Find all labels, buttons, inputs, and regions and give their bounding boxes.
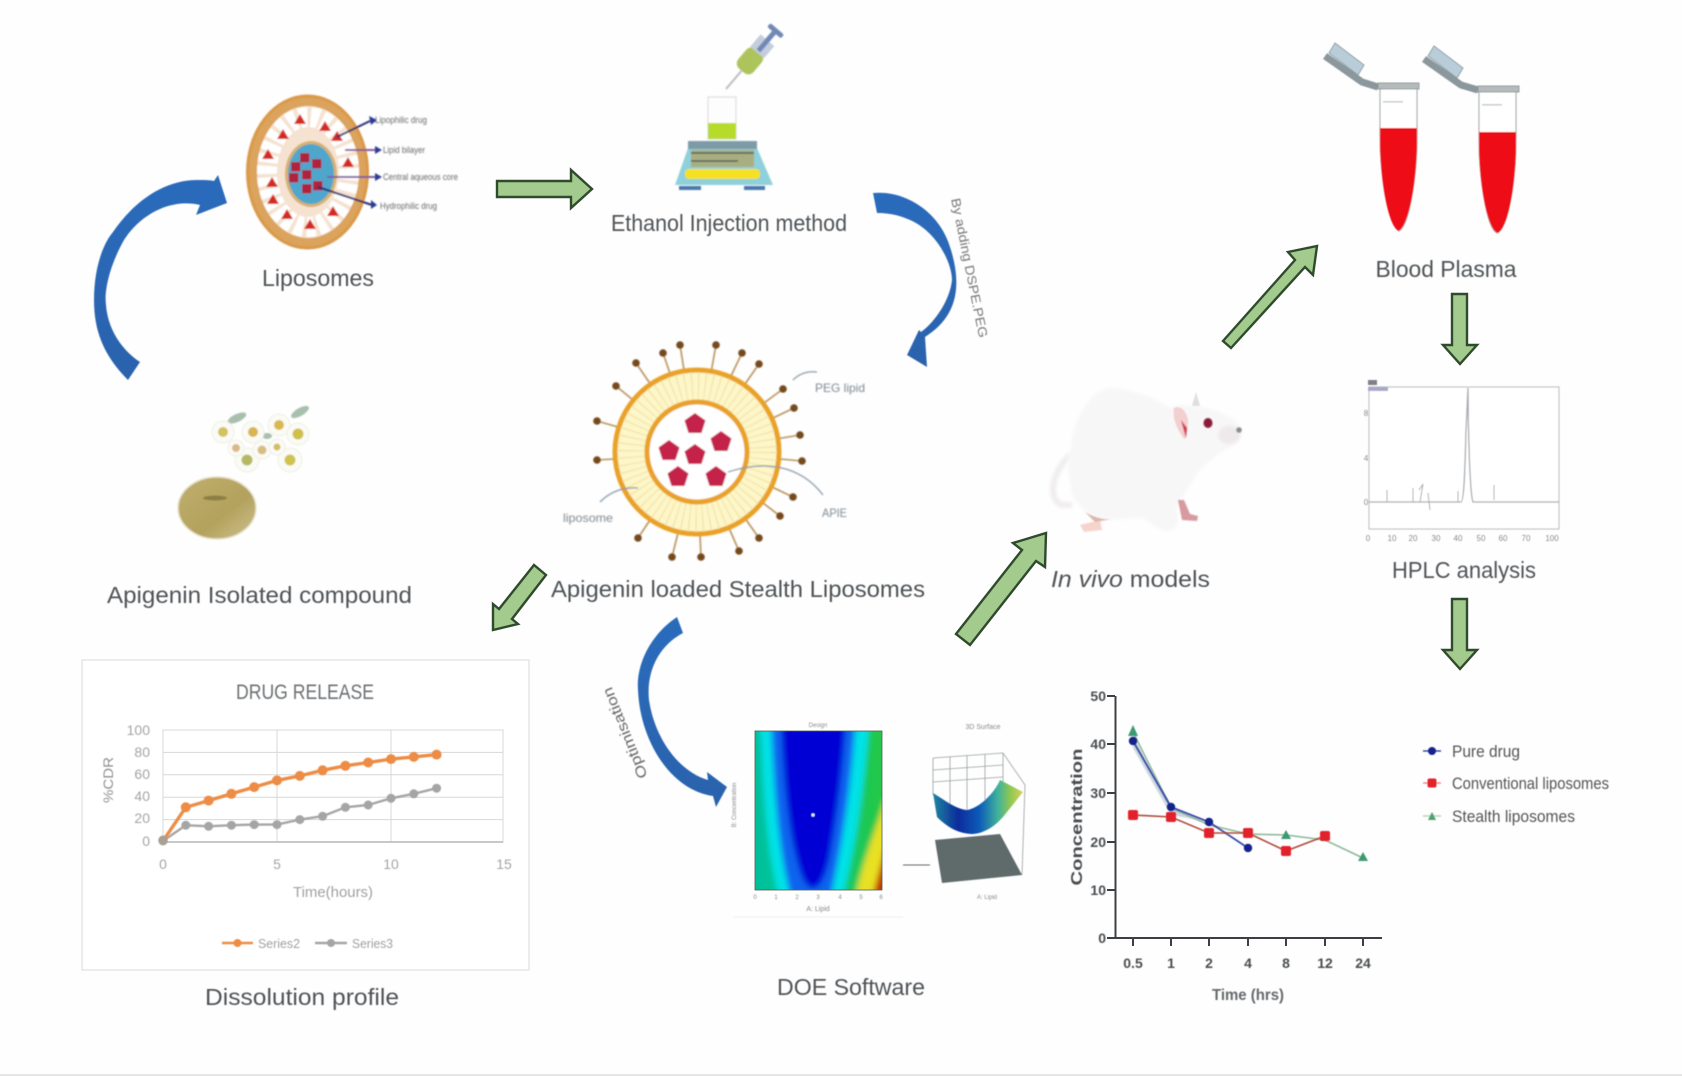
axis tick labels — [127, 722, 512, 872]
HPLC axis labels — [1364, 409, 1559, 543]
HPLC axis labels: 30 — [1432, 534, 1441, 543]
chart: HPLC chromatogram — [1364, 380, 1559, 543]
beaker — [708, 97, 736, 139]
axis tick labels: 20 — [134, 810, 150, 826]
series: stealth liposomes — [1128, 725, 1368, 861]
surface labels — [965, 724, 1001, 901]
chart title: DRUG RELEASE — [236, 681, 374, 704]
tick labels: 0 — [1098, 930, 1106, 946]
contour axis labels: 3 — [816, 895, 820, 901]
eye — [1204, 418, 1212, 428]
contour axis labels: 2 — [795, 895, 799, 901]
icon: stealth liposome — [563, 341, 865, 561]
PEG heads — [593, 341, 806, 561]
axis tick labels: 0 — [159, 856, 167, 872]
contour axis labels: 1 — [774, 895, 778, 901]
leader lines — [600, 372, 823, 502]
ears — [1174, 392, 1200, 439]
tube 1 body — [1380, 88, 1417, 231]
green arrow: to in vivo models — [956, 533, 1046, 645]
liposome labels — [375, 115, 458, 211]
response surface — [933, 780, 1023, 834]
chart: DOE 3D surface — [903, 724, 1025, 901]
body — [1068, 388, 1242, 531]
label: Liposomes: Liposomes — [262, 265, 374, 291]
aqueous core — [288, 144, 334, 204]
line shading — [1133, 735, 1209, 822]
tick labels: 50 — [1090, 688, 1106, 704]
chart: concentration vs time: Time (hrs) — [1212, 987, 1284, 1004]
callout arrows — [318, 121, 378, 205]
chart legend — [1423, 742, 1609, 826]
chart legend: Series2 — [258, 936, 300, 951]
green arrow: to concentration chart — [1443, 599, 1477, 669]
grid — [163, 730, 503, 842]
outer lipid shell — [248, 96, 368, 248]
bilayer ring — [615, 370, 779, 534]
liposome labels: Lipid bilayer — [383, 145, 425, 155]
chart legend: Stealth liposomes — [1452, 807, 1575, 826]
tail — [1053, 455, 1072, 505]
curved arrow: optimisation — [638, 617, 727, 807]
tick labels: 12 — [1317, 955, 1333, 971]
green arrow: to HPLC — [1443, 294, 1477, 364]
contour axis labels: A: Lipid — [806, 906, 830, 913]
tick labels: 24 — [1355, 955, 1371, 971]
tube 1 blood — [1380, 128, 1417, 231]
HPLC axis labels: 60 — [1499, 534, 1508, 543]
muzzle — [1218, 426, 1240, 444]
green arrow: liposomes to ethanol injection — [497, 170, 592, 208]
series 2 — [158, 750, 442, 844]
tube 2 cap — [1428, 46, 1463, 78]
HPLC axis labels: 8 — [1364, 409, 1369, 418]
chart: concentration vs time — [1069, 688, 1609, 1004]
axis titles: %CDR — [100, 757, 116, 803]
stealth liposome labels: liposome — [563, 511, 613, 525]
label: Apigenin loaded Stealth Liposomes: Apigenin loaded Stealth Liposomes — [551, 576, 925, 602]
tick labels: 8 — [1282, 955, 1290, 971]
tube 1 cap — [1329, 43, 1364, 75]
label: Apigenin Isolated compound: Apigenin Isolated compound — [107, 582, 412, 608]
liposome labels: Central aqueous core — [383, 172, 458, 182]
tick labels: 40 — [1090, 736, 1106, 752]
axis titles: Concentration — [1069, 748, 1086, 886]
hind leg shadow — [1085, 512, 1112, 522]
axis tick labels: 10 — [383, 856, 399, 872]
icon: rat — [1053, 388, 1242, 532]
lipid bilayer — [257, 106, 359, 238]
HPLC axis labels: 40 — [1454, 534, 1463, 543]
axes — [1107, 696, 1382, 946]
green arrow: to dissolution profile — [493, 565, 546, 630]
front foot — [1178, 500, 1198, 521]
HPLC axis labels: 20 — [1409, 534, 1418, 543]
surface labels: A: Lipid — [977, 895, 997, 901]
label: Ethanol Injection method: Ethanol Injection method — [611, 210, 847, 236]
balance — [675, 148, 773, 185]
drug pentagons — [658, 413, 732, 486]
tube 2 blood — [1479, 132, 1516, 233]
chart frame — [82, 660, 529, 970]
tick labels: 20 — [1090, 834, 1106, 850]
axis tick labels: 40 — [134, 788, 150, 804]
icon: syringe, beaker and balance — [675, 22, 785, 190]
contour axis labels: Design — [809, 723, 827, 729]
chart legend: Conventional liposomes — [1452, 774, 1609, 793]
design point — [811, 813, 815, 817]
syringe — [718, 22, 785, 95]
PEG chains — [597, 345, 802, 557]
liposome labels: Lipophilic drug — [375, 115, 427, 125]
axis tick labels: 15 — [496, 856, 512, 872]
contour axis labels: 6 — [879, 895, 883, 901]
powder — [178, 477, 256, 539]
series 3 — [158, 784, 441, 845]
HPLC axis labels: 4 — [1364, 454, 1369, 463]
chamomile flowers — [212, 414, 309, 472]
green arrow: to blood plasma — [1223, 246, 1317, 348]
tick labels: 10 — [1090, 882, 1106, 898]
contour axis labels — [732, 723, 883, 913]
label: Dissolution profile: Dissolution profile — [205, 984, 399, 1010]
tick labels: 2 — [1205, 955, 1213, 971]
liposome labels: Hydrophilic drug — [380, 201, 437, 211]
axis tick labels: 0 — [142, 833, 150, 849]
surface grid box — [933, 753, 1025, 875]
chart legend: Pure drug — [1452, 742, 1520, 761]
contour axis labels: B: Concentration — [732, 783, 738, 827]
curved arrow: compound to liposomes — [94, 175, 227, 380]
label: DOE Software: DOE Software — [777, 974, 925, 1000]
rotated label: by adding DSPE PEG: By adding DSPE.PEG — [948, 197, 991, 339]
icon: blood plasma tube 1 — [1325, 43, 1419, 231]
lipophilic drug triangles — [262, 114, 354, 229]
HPLC axis labels: 0 — [1364, 498, 1369, 507]
contour heatmap — [755, 731, 882, 890]
series: pure drug — [1129, 737, 1252, 852]
HPLC axis labels: 70 — [1522, 534, 1531, 543]
tick labels: 1 — [1167, 955, 1175, 971]
label: HPLC analysis: HPLC analysis — [1392, 557, 1536, 583]
stealth liposome labels: APIE — [822, 506, 847, 520]
tick labels — [1090, 688, 1371, 971]
icon: apigenin flowers and powder — [178, 404, 311, 539]
icon: liposome — [248, 96, 458, 248]
HPLC axis labels: 50 — [1477, 534, 1486, 543]
icon: blood plasma tube 2 — [1424, 46, 1519, 233]
tick labels: 0.5 — [1123, 955, 1143, 971]
contour axis labels: 0 — [753, 895, 757, 901]
chart legend: Series3 — [352, 936, 393, 951]
HPLC axis labels: 0 — [1366, 534, 1371, 543]
axis tick labels: 100 — [127, 722, 150, 738]
axis tick labels: 5 — [273, 856, 281, 872]
chromatogram frame — [1369, 387, 1559, 529]
HPLC axis labels: 10 — [1388, 534, 1397, 543]
leaves — [226, 404, 311, 439]
label: In vivo models: In vivo models — [1051, 566, 1210, 592]
contour axis labels: 5 — [859, 895, 863, 901]
rotated label: Optimisation: Optimisation — [599, 685, 652, 781]
hind foot — [1080, 520, 1102, 532]
chart: drug release — [82, 660, 529, 970]
stealth liposome labels: PEG lipid — [815, 381, 865, 395]
tick labels: 30 — [1090, 785, 1106, 801]
curved arrow: adding DSPE PEG — [873, 193, 956, 367]
chart: drug release: Time(hours) — [293, 884, 373, 901]
hydrophilic drug squares — [289, 153, 322, 194]
axis tick labels: 80 — [134, 744, 150, 760]
stealth liposome labels — [563, 381, 865, 525]
tube 2 body — [1479, 91, 1516, 233]
axis tick labels: 60 — [134, 766, 150, 782]
surface labels: 3D Surface — [965, 724, 1001, 731]
base plane — [935, 834, 1022, 883]
HPLC axis labels: 100 — [1545, 534, 1559, 543]
chart legend — [222, 936, 393, 951]
baseline and peaks — [1369, 388, 1559, 502]
chart: DOE contour plot — [732, 715, 903, 917]
tick labels: 4 — [1244, 955, 1252, 971]
series: conventional liposomes — [1128, 810, 1330, 856]
contour axis labels: 4 — [838, 895, 842, 901]
label: Blood Plasma: Blood Plasma — [1376, 256, 1517, 282]
